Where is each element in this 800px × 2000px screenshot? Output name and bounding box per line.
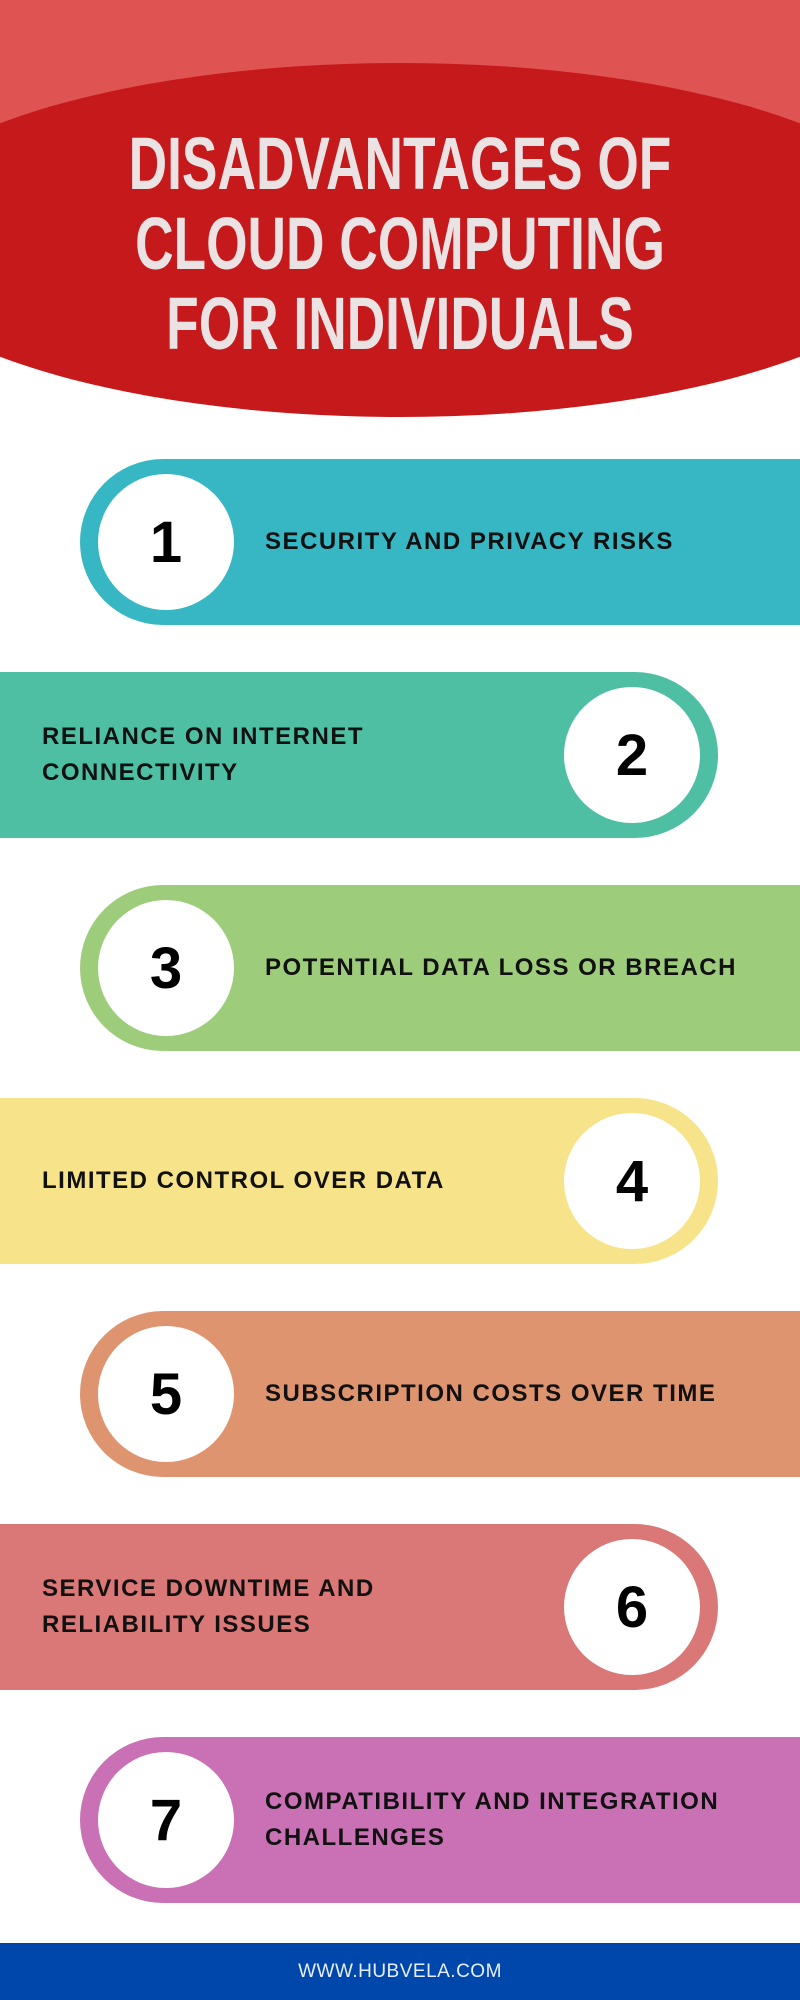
text 7: COMPATIBILITY AND INTEGRATION (265, 1788, 719, 1815)
text 2: CONNECTIVITY (42, 759, 239, 786)
number 7 (98, 1752, 234, 1888)
footer: WWW.HUBVELA.COM (298, 1960, 502, 1982)
text 3: POTENTIAL DATA LOSS OR BREACH (265, 954, 737, 981)
text 5: SUBSCRIPTION COSTS OVER TIME (265, 1380, 716, 1407)
number 2 (564, 687, 700, 823)
number 5 (98, 1326, 234, 1462)
text 6: RELIABILITY ISSUES (42, 1611, 311, 1638)
number 1: 1 (150, 510, 182, 574)
text 6 (42, 1575, 375, 1638)
number 3 (98, 900, 234, 1036)
number 1 (98, 474, 234, 610)
number 7: 7 (150, 1788, 182, 1852)
number 5: 5 (150, 1362, 182, 1426)
text 6: SERVICE DOWNTIME AND (42, 1575, 375, 1602)
number 3: 3 (150, 936, 182, 1000)
item 5 (80, 1311, 800, 1477)
text 2: RELIANCE ON INTERNET (42, 723, 364, 750)
number 6: 6 (616, 1574, 648, 1640)
item 3 (80, 885, 800, 1051)
item 4 (0, 1098, 718, 1264)
footer (0, 1943, 800, 2000)
text 4: LIMITED CONTROL OVER DATA (42, 1167, 445, 1194)
item 6 (0, 1524, 718, 1690)
title: FOR INDIVIDUALS (166, 282, 634, 365)
header background (0, 0, 800, 417)
number 4 (564, 1113, 700, 1249)
text 2 (42, 723, 364, 786)
title: CLOUD COMPUTING (135, 202, 665, 285)
text 1: SECURITY AND PRIVACY RISKS (265, 528, 674, 555)
item 1 (80, 459, 800, 625)
item 7 (80, 1737, 800, 1903)
text 7 (265, 1788, 719, 1851)
text 7: CHALLENGES (265, 1824, 445, 1851)
item 2 (0, 672, 718, 838)
number 2: 2 (616, 722, 648, 788)
number 6 (564, 1539, 700, 1675)
title: DISADVANTAGES OF (129, 122, 671, 205)
title (129, 122, 671, 365)
number 4: 4 (616, 1148, 648, 1214)
